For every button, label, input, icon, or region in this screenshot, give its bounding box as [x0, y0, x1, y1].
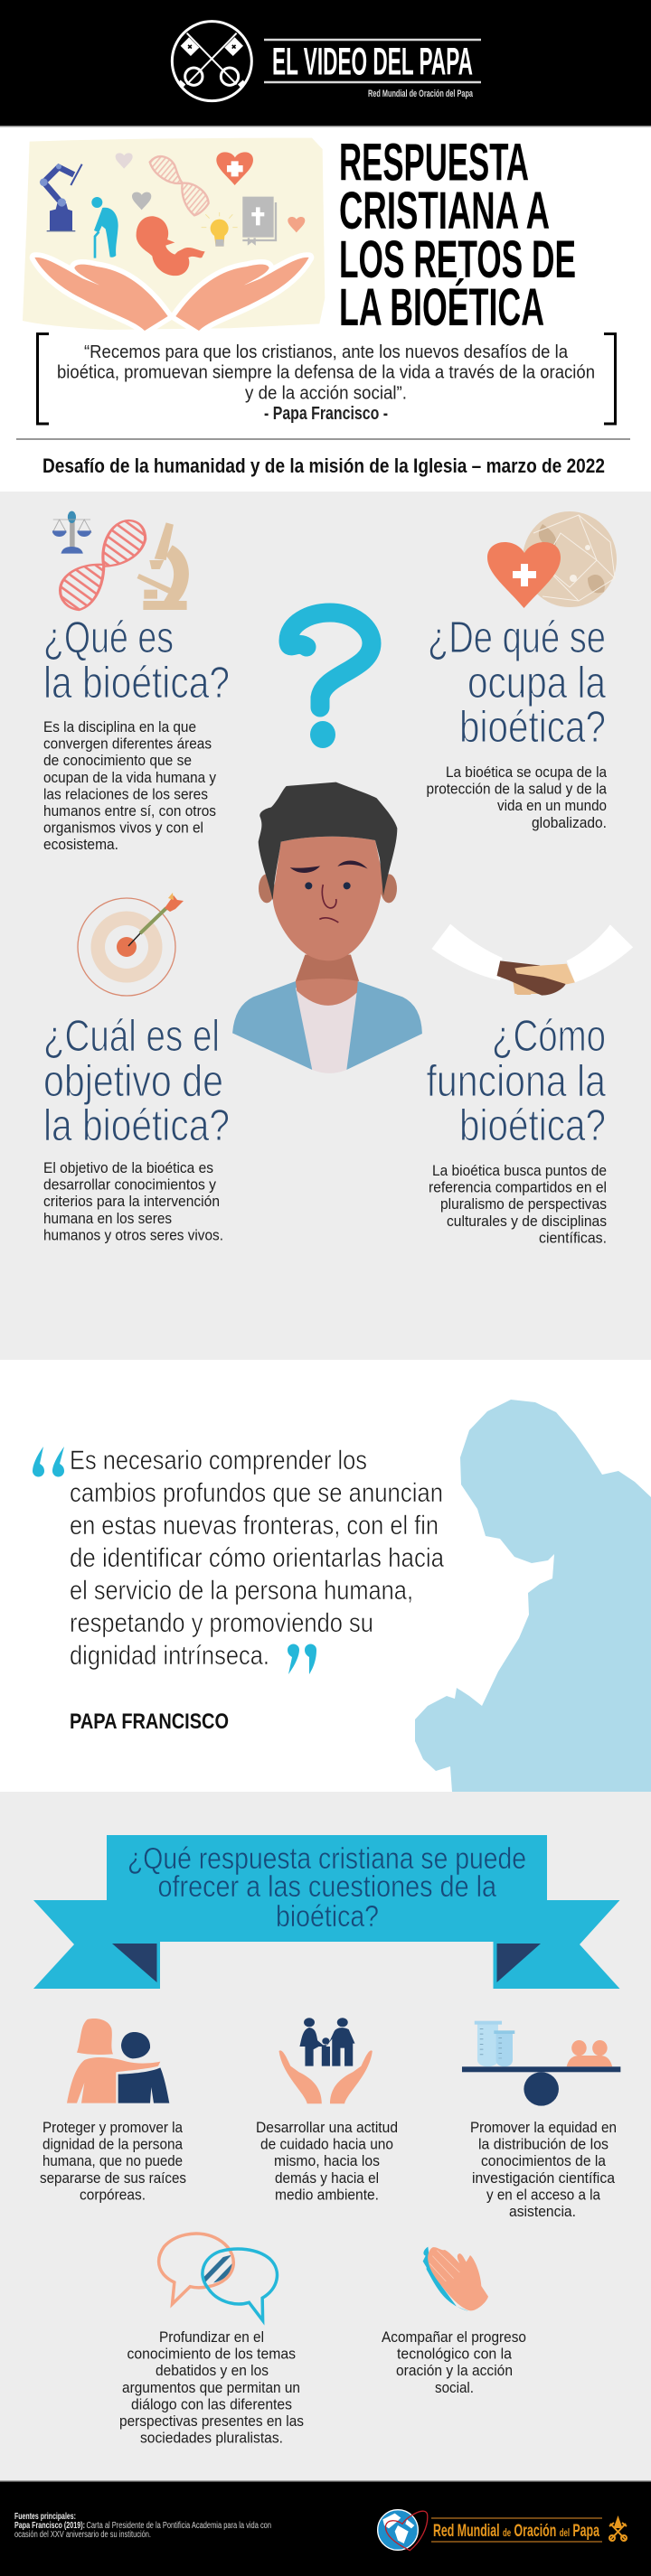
panel: pope quote: [0, 1360, 651, 1792]
body text: ecosistema.: [43, 836, 118, 853]
caption: Acompañar el progreso: [382, 2328, 526, 2346]
icon: robot arm: [40, 164, 82, 231]
caption: separarse de sus raíces: [40, 2169, 186, 2187]
body text: las relaciones de los seres: [43, 785, 208, 802]
quote text: [57, 342, 595, 424]
caption: Proteger y promover la: [42, 2119, 183, 2136]
ribbon banner: [33, 1835, 620, 1989]
icon: gray heart: [132, 192, 151, 210]
caption: argumentos que permitan un: [122, 2379, 300, 2396]
icon: gold crossed keys: [609, 2518, 627, 2541]
icon: light bulb: [202, 212, 238, 247]
caption: medio ambiente.: [275, 2186, 379, 2203]
opening quotation mark: [33, 1447, 64, 1476]
heading: ¿Cuál es el: [43, 1012, 220, 1061]
icon: right hand: [175, 258, 309, 331]
heading: [428, 614, 607, 752]
caption: debatidos y en los: [156, 2362, 269, 2379]
body text: [429, 1162, 607, 1246]
banner heading: [127, 1841, 526, 1933]
caption: social.: [435, 2379, 474, 2396]
sources: Papa Francisco (2019):: [14, 2521, 85, 2531]
quote text: respetando y promoviendo su: [70, 1608, 373, 1638]
heading: ¿Cómo: [492, 1012, 606, 1061]
caption: y en el acceso a la: [486, 2186, 600, 2203]
quote text: de identificar cómo orientarlas hacia: [70, 1543, 444, 1573]
body text: [43, 1159, 223, 1243]
icon: globe with heart: [378, 2510, 428, 2551]
panel: questions about bioethics: [0, 492, 651, 1360]
heading: ¿Qué es: [43, 614, 174, 662]
caption: diálogo con las diferentes: [131, 2395, 292, 2412]
quote text: Es necesario comprender los: [70, 1446, 367, 1475]
body text: culturales y de disciplinas: [447, 1213, 607, 1230]
heading: funciona la: [427, 1057, 607, 1106]
quote text: el servicio de la persona humana,: [70, 1576, 413, 1606]
caption: mismo, hacia los: [274, 2152, 380, 2169]
item: accompany progress: [382, 2247, 526, 2396]
sources: Carta al Presidente de la Pontificia Academia para la vida con: [87, 2521, 271, 2531]
body text: criterios para la intervención: [43, 1193, 220, 1210]
icon: DNA helix: [150, 156, 209, 215]
heading: [43, 614, 230, 707]
body text: convergen diferentes áreas: [43, 735, 212, 753]
heading: la bioética?: [43, 1101, 230, 1150]
block: what is the goal of bioethics: [43, 893, 230, 1243]
header band: [0, 0, 651, 126]
caption: oración y la acción: [396, 2362, 513, 2379]
network logo: Red Mundial de Oración del Papa: [433, 2522, 599, 2541]
quote text: en estas nuevas fronteras, con el fin: [70, 1511, 439, 1541]
icon: balance with test tubes and people: [462, 2021, 620, 2106]
quote text: [70, 1446, 444, 1671]
caption: Promover la equidad en: [470, 2119, 617, 2136]
caption: de cuidado hacia uno: [260, 2136, 393, 2153]
logo wordmark: EL VIDEO DEL PAPA: [272, 40, 473, 83]
caption: [40, 2119, 186, 2203]
item: attitude of care: [256, 2018, 398, 2203]
item: deepen knowledge: [119, 2234, 304, 2447]
icon: scales, DNA and microscope: [52, 511, 189, 610]
caption: Desarrollar una actitud: [256, 2119, 398, 2136]
man's head: [259, 782, 397, 960]
caption: Profundizar en el: [159, 2328, 264, 2346]
quote text: bioética, promuevan siempre la defensa de la vida a través de la oración: [57, 363, 595, 383]
caption: [470, 2119, 617, 2220]
body text: referencia compartidos en el: [429, 1179, 607, 1196]
icon: pale heart: [116, 153, 133, 169]
icon: target and dart: [78, 893, 184, 996]
caption: perspectivas presentes en las: [119, 2412, 304, 2430]
icon: heart and globe: [487, 511, 617, 608]
caption: conocimientos de la: [481, 2152, 606, 2169]
sources: ocasión del XXV aniversario de su institución.: [14, 2530, 151, 2540]
bracketed prayer intention: [38, 334, 615, 424]
logo rules: [264, 40, 481, 82]
body text: humanos entre sí, con otros: [43, 802, 216, 820]
heading: la bioética?: [43, 659, 230, 707]
sources: [14, 2512, 271, 2540]
heading: ocupa la: [467, 659, 607, 707]
caption: corpóreas.: [80, 2186, 146, 2203]
illustration: bioethics hands: [23, 138, 325, 331]
body text: científicas.: [539, 1229, 607, 1246]
logo subtitle: Red Mundial de Oración del Papa: [368, 89, 474, 99]
caption: humana, que no puede: [42, 2152, 183, 2169]
heading: bioética?: [459, 1101, 606, 1150]
heading: objetivo de: [43, 1057, 223, 1106]
caption: la distribución de los: [478, 2136, 609, 2153]
banner heading: ¿Qué respuesta cristiana se puede: [127, 1841, 526, 1875]
body text: globalizado.: [532, 814, 607, 831]
heading: [427, 1012, 607, 1150]
caption: asistencia.: [509, 2203, 576, 2220]
body text: vida en un mundo: [497, 797, 607, 814]
silhouette of praying pope: [415, 1400, 651, 1792]
item: protect dignity: [40, 2019, 186, 2203]
body text: [43, 718, 216, 853]
item: equity: [462, 2021, 620, 2220]
sources: Fuentes principales:: [14, 2512, 76, 2522]
body text: La bioética busca puntos de: [432, 1162, 607, 1179]
body text: [427, 763, 607, 831]
block: what does bioethics deal with: [427, 511, 617, 831]
body text: Es la disciplina en la que: [43, 718, 196, 735]
caption: [256, 2119, 398, 2203]
body text: La bioética se ocupa de la: [446, 763, 607, 781]
illustration: thinking man: [232, 782, 422, 1073]
body text: de conocimiento que se: [43, 752, 192, 769]
icon: elderly person: [91, 197, 118, 258]
quote text: y de la acción social”.: [245, 383, 407, 403]
panel: christian response: [0, 1792, 651, 2480]
caption: [382, 2328, 526, 2396]
attribution: PAPA FRANCISCO: [70, 1710, 229, 1734]
heading: ¿De qué se: [428, 614, 606, 662]
quote text: cambios profundos que se anuncian: [70, 1478, 443, 1508]
icon: family held in hands: [279, 2018, 373, 2103]
icon: overlapping speech bubbles: [159, 2234, 277, 2320]
cream backdrop: [23, 138, 325, 330]
main title: RESPUESTA: [339, 134, 529, 192]
body text: pluralismo de perspectivas: [440, 1195, 607, 1213]
icon: bible: [242, 197, 276, 243]
body text: organismos vivos y con el: [43, 820, 203, 837]
footer: [0, 2480, 651, 2576]
body text: El objetivo de la bioética es: [43, 1159, 213, 1176]
quote text: “Recemos para que los cristianos, ante los nuevos desafíos de la: [84, 342, 569, 362]
icon: question mark: [288, 613, 372, 748]
body text: humanos y otros seres vivos.: [43, 1226, 223, 1243]
icon: handshake: [431, 924, 633, 996]
man's body: [232, 955, 422, 1073]
caption: investigación científica: [472, 2169, 616, 2187]
body text: humana en los seres: [43, 1210, 172, 1227]
icon: left hand: [34, 258, 168, 331]
brackets: [38, 334, 615, 424]
banner heading: bioética?: [276, 1899, 379, 1933]
body text: desarrollar conocimientos y: [43, 1176, 216, 1194]
icon: praying hands: [423, 2247, 488, 2311]
caption: sociedades pluralistas.: [140, 2430, 283, 2447]
caption: [119, 2328, 304, 2447]
closing quotation mark: [288, 1644, 316, 1674]
caption: dignidad de la persona: [42, 2136, 183, 2153]
heading: [43, 1012, 230, 1150]
icon: fetus: [137, 216, 205, 276]
block: what is bioethics: [43, 511, 230, 853]
heading: bioética?: [459, 703, 606, 752]
icon: crossed keys logo: [172, 22, 251, 101]
block: how does bioethics work: [427, 924, 633, 1246]
body text: protección de la salud y de la: [427, 781, 607, 798]
body text: ocupan de la vida humana y: [43, 769, 216, 786]
quote text: - Papa Francisco -: [264, 404, 388, 424]
icon: two people embracing: [67, 2019, 169, 2103]
caption: tecnológico con la: [397, 2346, 513, 2363]
network logo: [378, 2510, 627, 2551]
quote text: dignidad intrínseca.: [70, 1641, 269, 1671]
icon: small heart: [288, 217, 305, 232]
banner heading: ofrecer a las cuestiones de la: [157, 1869, 497, 1903]
main title: [339, 134, 576, 337]
caption: conocimiento de los temas: [127, 2346, 296, 2363]
caption: demás y hacia el: [275, 2169, 379, 2187]
icon: heart with cross: [216, 152, 253, 185]
